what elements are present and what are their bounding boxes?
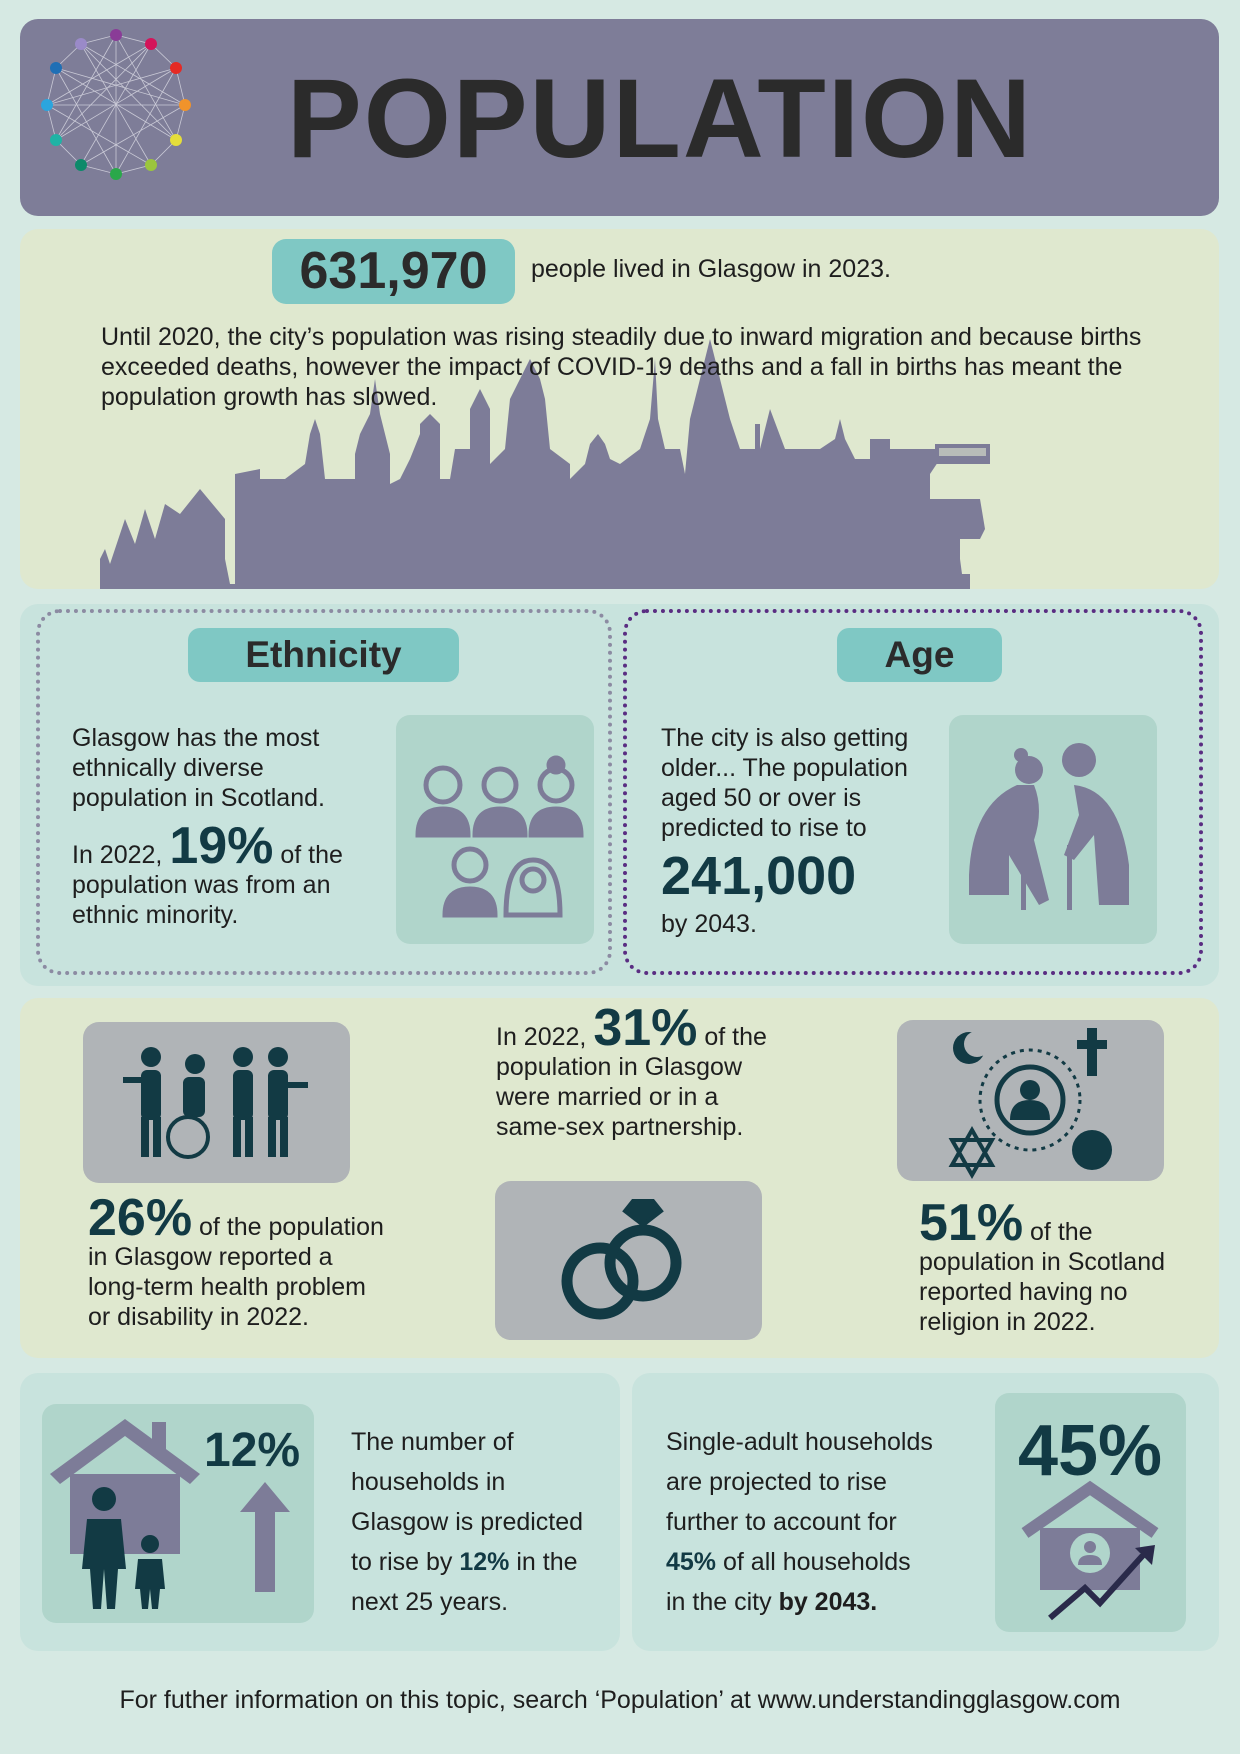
heading: age (837, 628, 1002, 682)
text: marriage: In 2022, 31% of the population in Glasgow were married or in a same-sex partnership. (496, 999, 767, 1141)
panel: population total (20, 229, 1219, 589)
panel: ethnicity and age (20, 604, 1219, 986)
icon: religion (897, 1020, 1164, 1181)
text: people lived: people lived in Glasgow in 2023. (531, 255, 891, 283)
panel: single-adult households (632, 1373, 1219, 1651)
heading: ethnicity (188, 628, 459, 682)
text: age: The city is also getting older... The population aged 50 or over is predicted to rise to by 2043. (661, 724, 908, 938)
icon: elderly couple (949, 715, 1157, 944)
icon: house family arrow: 12% (204, 1424, 300, 1477)
header panel (20, 19, 1219, 216)
paragraph: Until 2020, the city’s population was rising steadily due to inward migration and because births exceeded deaths, however the impact of COVID-19 deaths and a fall in births has meant the population growth has slowed. (101, 323, 1141, 411)
panel: age (623, 609, 1203, 975)
icon: 45% house (995, 1393, 1186, 1632)
icon: 45% house: 45% (1018, 1411, 1162, 1491)
icon: house family arrow (42, 1404, 314, 1623)
icon: disability group (83, 1022, 350, 1183)
icon: rings (495, 1181, 762, 1340)
text: single adult: Single-adult households are projected to rise further to account for 45% of all households in the city by 2043. (666, 1428, 933, 1616)
title: POPULATION (287, 56, 1033, 181)
panel: households (20, 1373, 620, 1651)
icon: diverse people (396, 715, 594, 944)
panel: health, marriage, religion (20, 998, 1219, 1358)
text: disability: 26% of the population in Glasgow reported a long-term health problem or disability in 2022. (88, 1189, 384, 1331)
panel: ethnicity (36, 609, 612, 975)
text: households: The number of households in Glasgow is predicted to rise by 12% in the next 25 years. (351, 1428, 583, 1616)
skyline (100, 339, 990, 589)
number box (272, 239, 515, 304)
text: religion: 51% of the population in Scotland reported having no religion in 2022. (919, 1194, 1165, 1336)
icon: network logo (41, 29, 191, 180)
number box: 631,970 (300, 242, 487, 300)
text: age: 241,000 (661, 846, 856, 906)
text: ethnicity: Glasgow has the most ethnically diverse population in Scotland. (72, 724, 325, 812)
heading: age: Age (885, 634, 954, 675)
text: ethnicity: In 2022, 19% of the population was from an ethnic minority. (72, 817, 343, 929)
text: ethnicity (72, 724, 343, 929)
heading: ethnicity: Ethnicity (245, 634, 402, 675)
footer: For futher information on this topic, search ‘Population’ at www.understandingglasgow.com (119, 1686, 1120, 1714)
